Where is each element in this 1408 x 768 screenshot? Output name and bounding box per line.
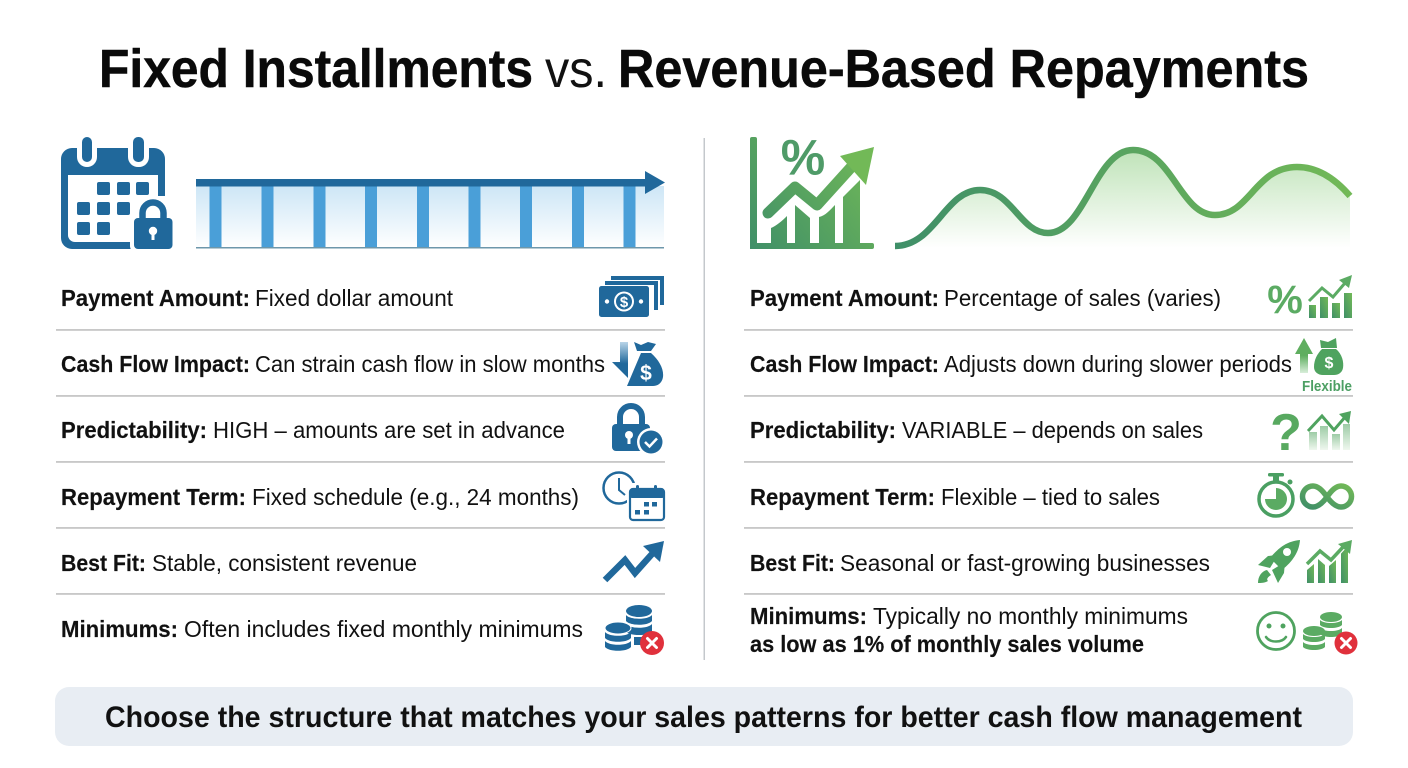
row: cash flow impact: Cash Flow Impact: <box>61 351 250 377</box>
row: best fit: Best Fit: <box>750 550 835 576</box>
row: payment amount: Payment Amount: <box>750 285 939 311</box>
row: cash flow impact <box>750 338 1352 395</box>
row: minimums: as low as 1% of monthly sales volume <box>750 631 1144 657</box>
row: minimums <box>750 603 1358 657</box>
panel: revenue-based repayments <box>744 130 1358 657</box>
center divider <box>704 138 705 660</box>
callout: bottom banner: Choose the structure that matches your sales patterns for better cash flow management <box>105 701 1302 734</box>
row: repayment term: Repayment Term: <box>61 484 246 510</box>
title <box>99 39 1309 99</box>
row: cash flow impact: Adjusts down during slower periods <box>944 351 1292 377</box>
row: repayment term: Fixed schedule (e.g., 24 months) <box>252 484 579 510</box>
icon: rising trend arrow <box>605 541 664 580</box>
icon: down arrow and money bag: $ <box>640 362 652 385</box>
title: vs. <box>545 41 607 99</box>
row: cash flow impact: Cash Flow Impact: <box>750 351 939 377</box>
row: repayment term <box>61 472 666 522</box>
row: minimums: Often includes fixed monthly minimums <box>184 616 583 642</box>
icon: up arrow and money bag flexible: $ <box>1325 355 1334 372</box>
row: predictability: HIGH – amounts are set in advance <box>213 417 565 443</box>
callout: bottom banner <box>55 687 1353 746</box>
icon: down arrow and money bag <box>612 342 663 386</box>
row: best fit: Best Fit: <box>61 550 146 576</box>
row: predictability <box>750 404 1351 462</box>
row: best fit: Stable, consistent revenue <box>152 550 417 576</box>
icon: stack of bills <box>599 276 664 317</box>
timeline: fixed payments <box>196 171 665 248</box>
icon: lock with check <box>612 406 665 456</box>
icon: up arrow and money bag flexible <box>1295 338 1352 395</box>
row: predictability: Predictability: <box>61 417 207 443</box>
icon: percent and chart <box>1267 275 1352 322</box>
icon: coins with red x <box>605 605 664 655</box>
icon: stopwatch and infinity <box>1259 473 1352 516</box>
row: repayment term: Flexible – tied to sales <box>941 484 1160 510</box>
icon: question mark and faded chart: ? <box>1270 404 1302 462</box>
icon: percent chart with arrow <box>750 130 874 249</box>
icon: smiley and coins with red x <box>1258 612 1358 654</box>
row: payment amount: Percentage of sales (varies) <box>944 285 1221 311</box>
icon: calendar with lock <box>61 137 177 252</box>
row: repayment term <box>750 473 1352 516</box>
row: best fit <box>750 540 1352 583</box>
row: predictability <box>61 406 665 456</box>
row: best fit <box>61 541 664 580</box>
icon: rocket and chart <box>1258 540 1352 583</box>
row: payment amount <box>750 275 1352 322</box>
icon: stack of bills: $ <box>620 294 629 311</box>
row: cash flow impact <box>61 342 663 386</box>
row: predictability: VARIABLE – depends on sales <box>902 417 1203 443</box>
row: best fit: Seasonal or fast-growing businesses <box>840 550 1210 576</box>
row: minimums: Typically no monthly minimums <box>873 603 1188 629</box>
row: payment amount: Payment Amount: <box>61 285 250 311</box>
row: minimums: Minimums: <box>61 616 178 642</box>
icon: percent and chart: % <box>1267 278 1303 322</box>
icon: question mark and faded chart <box>1270 404 1351 462</box>
row: predictability: Predictability: <box>750 417 896 443</box>
panel: fixed installments <box>56 137 666 655</box>
icon: up arrow and money bag flexible: Flexible <box>1302 379 1352 395</box>
chart: revenue wave <box>895 150 1350 248</box>
row: payment amount: Fixed dollar amount <box>255 285 454 311</box>
row: repayment term: Repayment Term: <box>750 484 935 510</box>
icon: clock and calendar <box>604 472 666 522</box>
title: Fixed Installments <box>99 39 533 99</box>
row: minimums: Minimums: <box>750 603 867 629</box>
title: Revenue-Based Repayments <box>618 39 1309 99</box>
icon: percent chart with arrow: % <box>781 130 825 186</box>
row: cash flow impact: Can strain cash flow in slow months <box>255 351 605 377</box>
row: minimums <box>61 605 664 655</box>
row: payment amount <box>61 276 664 317</box>
